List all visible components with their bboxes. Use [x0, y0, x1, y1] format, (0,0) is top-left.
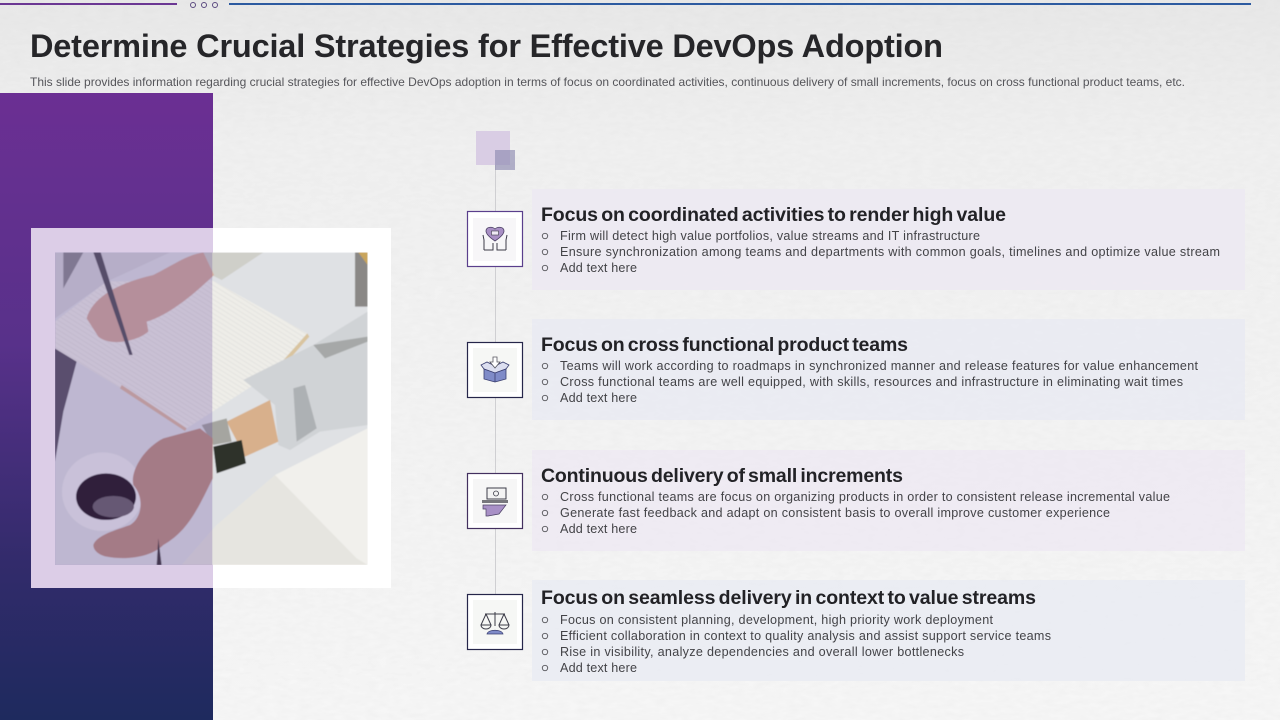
bullet list	[542, 229, 1220, 275]
bullet list: Focus on consistent planning, development, high priority work deployment	[560, 613, 994, 627]
heading: Focus on coordinated activities to render high value	[541, 204, 1006, 226]
timeline connector	[495, 165, 496, 605]
icon: hands holding heart	[468, 212, 522, 266]
bullet list: Cross functional teams are well equipped, with skills, resources and infrastructure in eliminating wait times	[560, 375, 1183, 389]
top decorative bar	[0, 2, 1251, 8]
bullet list: Generate fast feedback and adapt on consistent basis to overall improve customer experience	[560, 506, 1110, 520]
bullet list	[542, 359, 1198, 405]
bullet list: Firm will detect high value portfolios, value streams and IT infrastructure	[560, 229, 980, 243]
subtitle: This slide provides information regarding crucial strategies for effective DevOps adoption in terms of focus on coordinated activities, continuous delivery of small increments, focus on cross functional product teams, etc.	[30, 75, 1185, 89]
heading: Focus on seamless delivery in context to value streams	[541, 587, 1036, 609]
bullet list: Add text here	[560, 261, 637, 275]
icon: overlapping squares	[476, 131, 515, 170]
panel: purple gradient side band	[0, 93, 213, 720]
bullet list	[542, 613, 1051, 675]
bullet list: Ensure synchronization among teams and departments with common goals, timelines and optimize value stream	[560, 245, 1220, 259]
bullet list: Add text here	[560, 522, 637, 536]
bullet list: Rise in visibility, analyze dependencies and overall lower bottlenecks	[560, 645, 964, 659]
title: Determine Crucial Strategies for Effective DevOps Adoption	[30, 28, 943, 64]
bullet list: Add text here	[560, 391, 637, 405]
icon: box with down arrow	[468, 342, 522, 398]
bullet list: Efficient collaboration in context to quality analysis and assist support service teams	[560, 629, 1051, 643]
bullet list: Add text here	[560, 661, 637, 675]
icon: hand holding laptop	[468, 474, 522, 528]
heading: Continuous delivery of small increments	[541, 465, 903, 487]
icon: balance scale	[468, 594, 522, 650]
bullet list	[542, 490, 1170, 536]
panel: photo frame	[31, 228, 391, 588]
panel: strategy 3	[532, 450, 1245, 551]
panel: strategy 2	[532, 319, 1245, 420]
bullet list: Teams will work according to roadmaps in synchronized manner and release features for value enhancement	[560, 359, 1198, 373]
panel: strategy 1	[532, 189, 1245, 290]
photo: writing in notebook with coffee	[55, 252, 368, 565]
heading: Focus on cross functional product teams	[541, 334, 908, 356]
panel: strategy 4	[532, 580, 1245, 681]
bullet list: Cross functional teams are focus on organizing products in order to consistent release incremental value	[560, 490, 1170, 504]
